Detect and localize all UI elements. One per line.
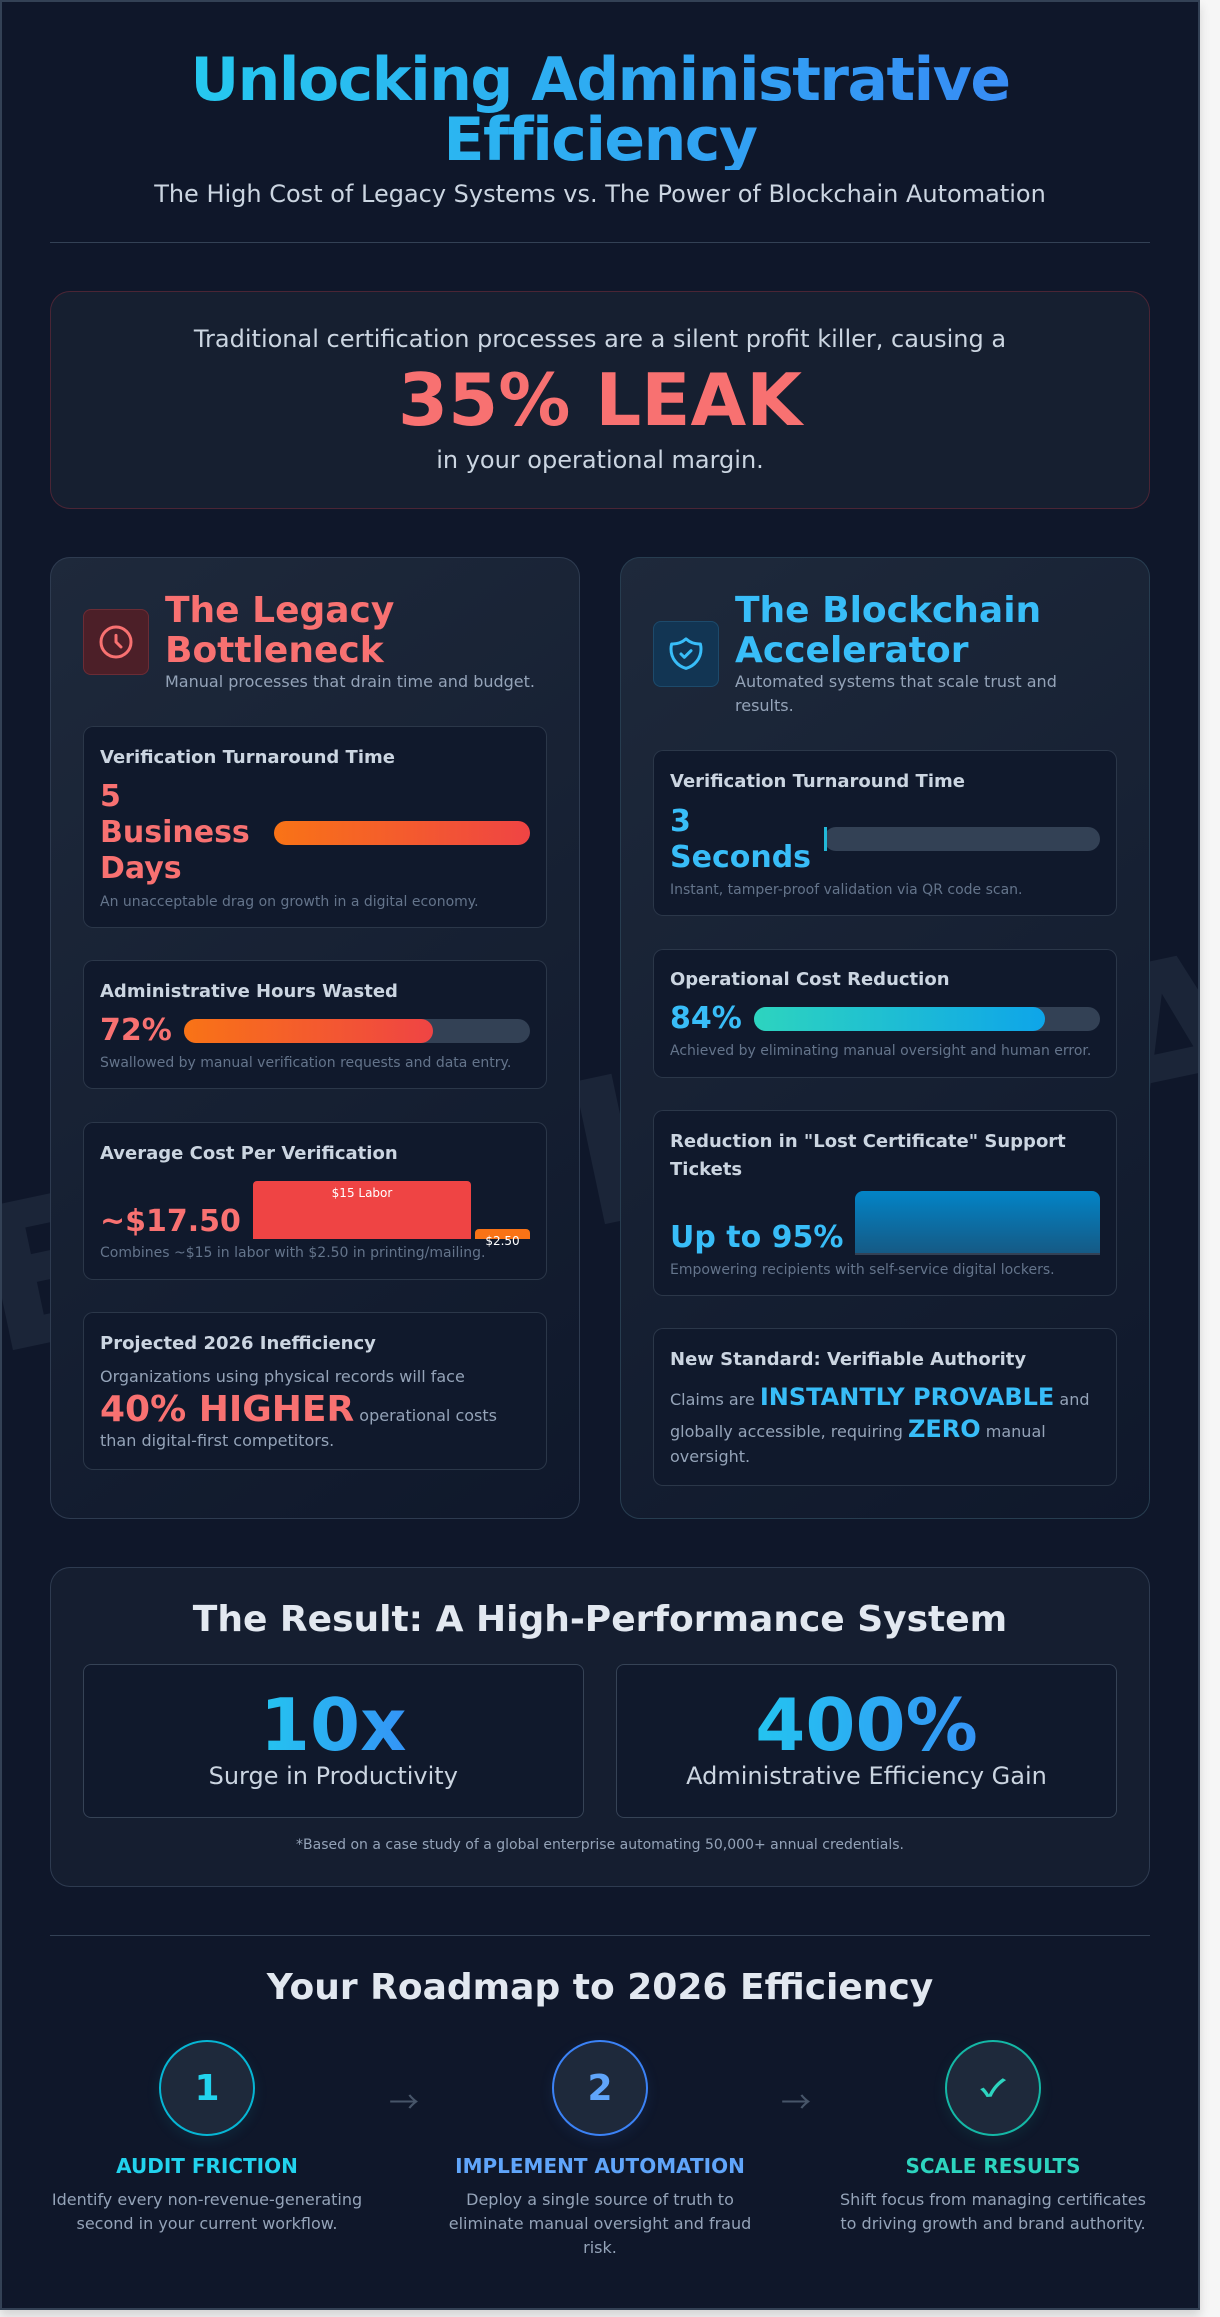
card: administrative hours wasted [83,960,547,1089]
arrow: → [781,2078,811,2122]
bar: full gradient [274,821,530,845]
card note: Swallowed by manual verification requests and data entry. [100,1055,511,1071]
card label: Projected 2026 Inefficiency [100,1332,376,1354]
stat number: 400% [755,1683,978,1767]
text line: Organizations using physical records will face [100,1367,465,1386]
value: 3 seconds: 3 [670,804,691,839]
card label: New Standard: Verifiable Authority [670,1348,1026,1370]
footnote: *Based on a case study of a global enterprise automating 50,000+ annual credentials. [296,1837,904,1853]
stat card: productivity [83,1664,584,1818]
step text: risk. [583,2238,617,2256]
stat number: 10x [260,1683,407,1767]
step circle [552,2040,648,2136]
stat label: Administrative Efficiency Gain [686,1762,1047,1790]
panel: 35% leak callout [50,291,1150,509]
panel heading: Accelerator [735,630,968,670]
step 2: implement automation [449,2040,751,2256]
panel subheading [735,672,1057,714]
card label: Administrative Hours Wasted [100,980,398,1002]
step circle: 1 [194,2068,220,2108]
card: new standard [653,1328,1117,1486]
bar: labor cost [253,1181,471,1239]
card: verification turnaround time [653,750,1117,916]
title [50,50,1150,170]
panel heading: The Blockchain [735,590,1041,630]
bar: 72 percent [184,1019,530,1043]
step circle: 2 [587,2068,613,2108]
card: lost certificate tickets [653,1110,1117,1296]
step circle [945,2040,1041,2136]
step text: eliminate manual oversight and fraud [449,2214,751,2232]
subtitle: The High Cost of Legacy Systems vs. The Power of Blockchain Automation [154,180,1046,208]
value: up to 95%: Up to 95% [670,1220,843,1255]
value: 5 business days: Days [100,850,182,886]
step text [840,2190,1146,2232]
panel subheading: Manual processes that drain time and budget. [165,672,535,690]
value: 5 business days [100,778,250,886]
card note: Instant, tamper-proof validation via QR code scan. [670,882,1022,898]
card label: Average Cost Per Verification [100,1143,398,1164]
step text [449,2190,751,2256]
panel heading [735,590,1041,670]
panel subheading: Automated systems that scale trust and [735,672,1057,690]
panel subheading: results. [735,696,794,714]
bar: 1 percent [824,827,1100,851]
bar: 95 percent reduction [855,1191,1100,1255]
step title: SCALE RESULTS [905,2154,1081,2178]
watermark: large rotated background lettering: I [549,1032,670,1275]
card label: Reduction in "Lost Certificate" Support [670,1130,1066,1152]
value: 3 seconds [670,804,811,875]
text line with highlight: globally accessible, requiring ZERO manual [670,1415,1046,1443]
step text: Shift focus from managing certificates [840,2190,1146,2208]
title: Efficiency [444,105,756,175]
step title: IMPLEMENT AUTOMATION [455,2154,745,2178]
card: verification turnaround time [83,726,547,928]
card note: An unacceptable drag on growth in a digital economy. [100,894,479,910]
card label: Verification Turnaround Time [100,747,395,768]
card: average cost per verification: $2.50 [485,1234,520,1248]
text line: than digital-first competitors. [100,1431,334,1450]
panel heading: The Legacy [165,590,394,630]
step text: Deploy a single source of truth to [466,2190,734,2208]
step text: second in your current workflow. [76,2214,337,2232]
step circle [159,2040,255,2136]
stat label: Surge in Productivity [209,1762,458,1790]
heading: roadmap: Your Roadmap to 2026 Efficiency [267,1967,933,2008]
step 1: audit friction [52,2040,362,2232]
card note: Combines ~$15 in labor with $2.50 in printing/mailing. [100,1244,485,1260]
value: 5 business days: Business [100,814,250,850]
value: 84%: 84% [670,1001,742,1036]
value: 3 seconds: Seconds [670,840,811,875]
card label: Tickets [670,1159,742,1180]
callout big number: 35% LEAK [398,358,802,442]
panel: the legacy bottleneck [50,557,580,1519]
bar: 84 percent [754,1007,1100,1031]
arrow: → [389,2078,419,2122]
card note: Empowering recipients with self-service digital lockers. [670,1262,1055,1278]
text line with highlight: Claims are INSTANTLY PROVABLE and [670,1382,1090,1410]
step 3: scale results [840,2040,1146,2232]
panel heading: Bottleneck [165,630,384,670]
highlight: 40% higher: 40% HIGHER operational costs [100,1388,497,1430]
title: Unlocking Administrative [190,45,1010,115]
bar: printing cost [475,1229,530,1239]
step text [52,2190,362,2232]
card note: Achieved by eliminating manual oversight and human error. [670,1043,1091,1059]
icon: shield check [653,621,719,687]
card label: Verification Turnaround Time [670,770,965,792]
text line: oversight. [670,1447,750,1466]
panel: the result [50,1567,1150,1887]
card label [670,1130,1066,1180]
bar: labor cost: $15 Labor [332,1186,392,1200]
callout closing text: in your operational margin. [436,446,764,474]
stat card: efficiency gain [616,1664,1117,1818]
step text: Identify every non-revenue-generating [52,2190,362,2208]
callout intro text: Traditional certification processes are a silent profit killer, causing a [194,325,1006,353]
value: 5 business days: 5 [100,778,121,814]
step title: AUDIT FRICTION [116,2154,298,2178]
value: 72%: 72% [100,1013,172,1048]
heading: The Result: A High-Performance System [193,1599,1007,1640]
icon: clock [83,608,149,674]
card: projected 2026 inefficiency [83,1312,547,1470]
panel: the blockchain accelerator [620,557,1150,1519]
card label: Operational Cost Reduction [670,969,950,990]
icon: check mark: ✓ [980,2070,1006,2103]
card: operational cost reduction [653,949,1117,1078]
panel heading [165,590,394,670]
card: average cost per verification [83,1122,547,1280]
step text: to driving growth and brand authority. [840,2214,1146,2232]
value: cost: ~$17.50 [100,1204,241,1239]
